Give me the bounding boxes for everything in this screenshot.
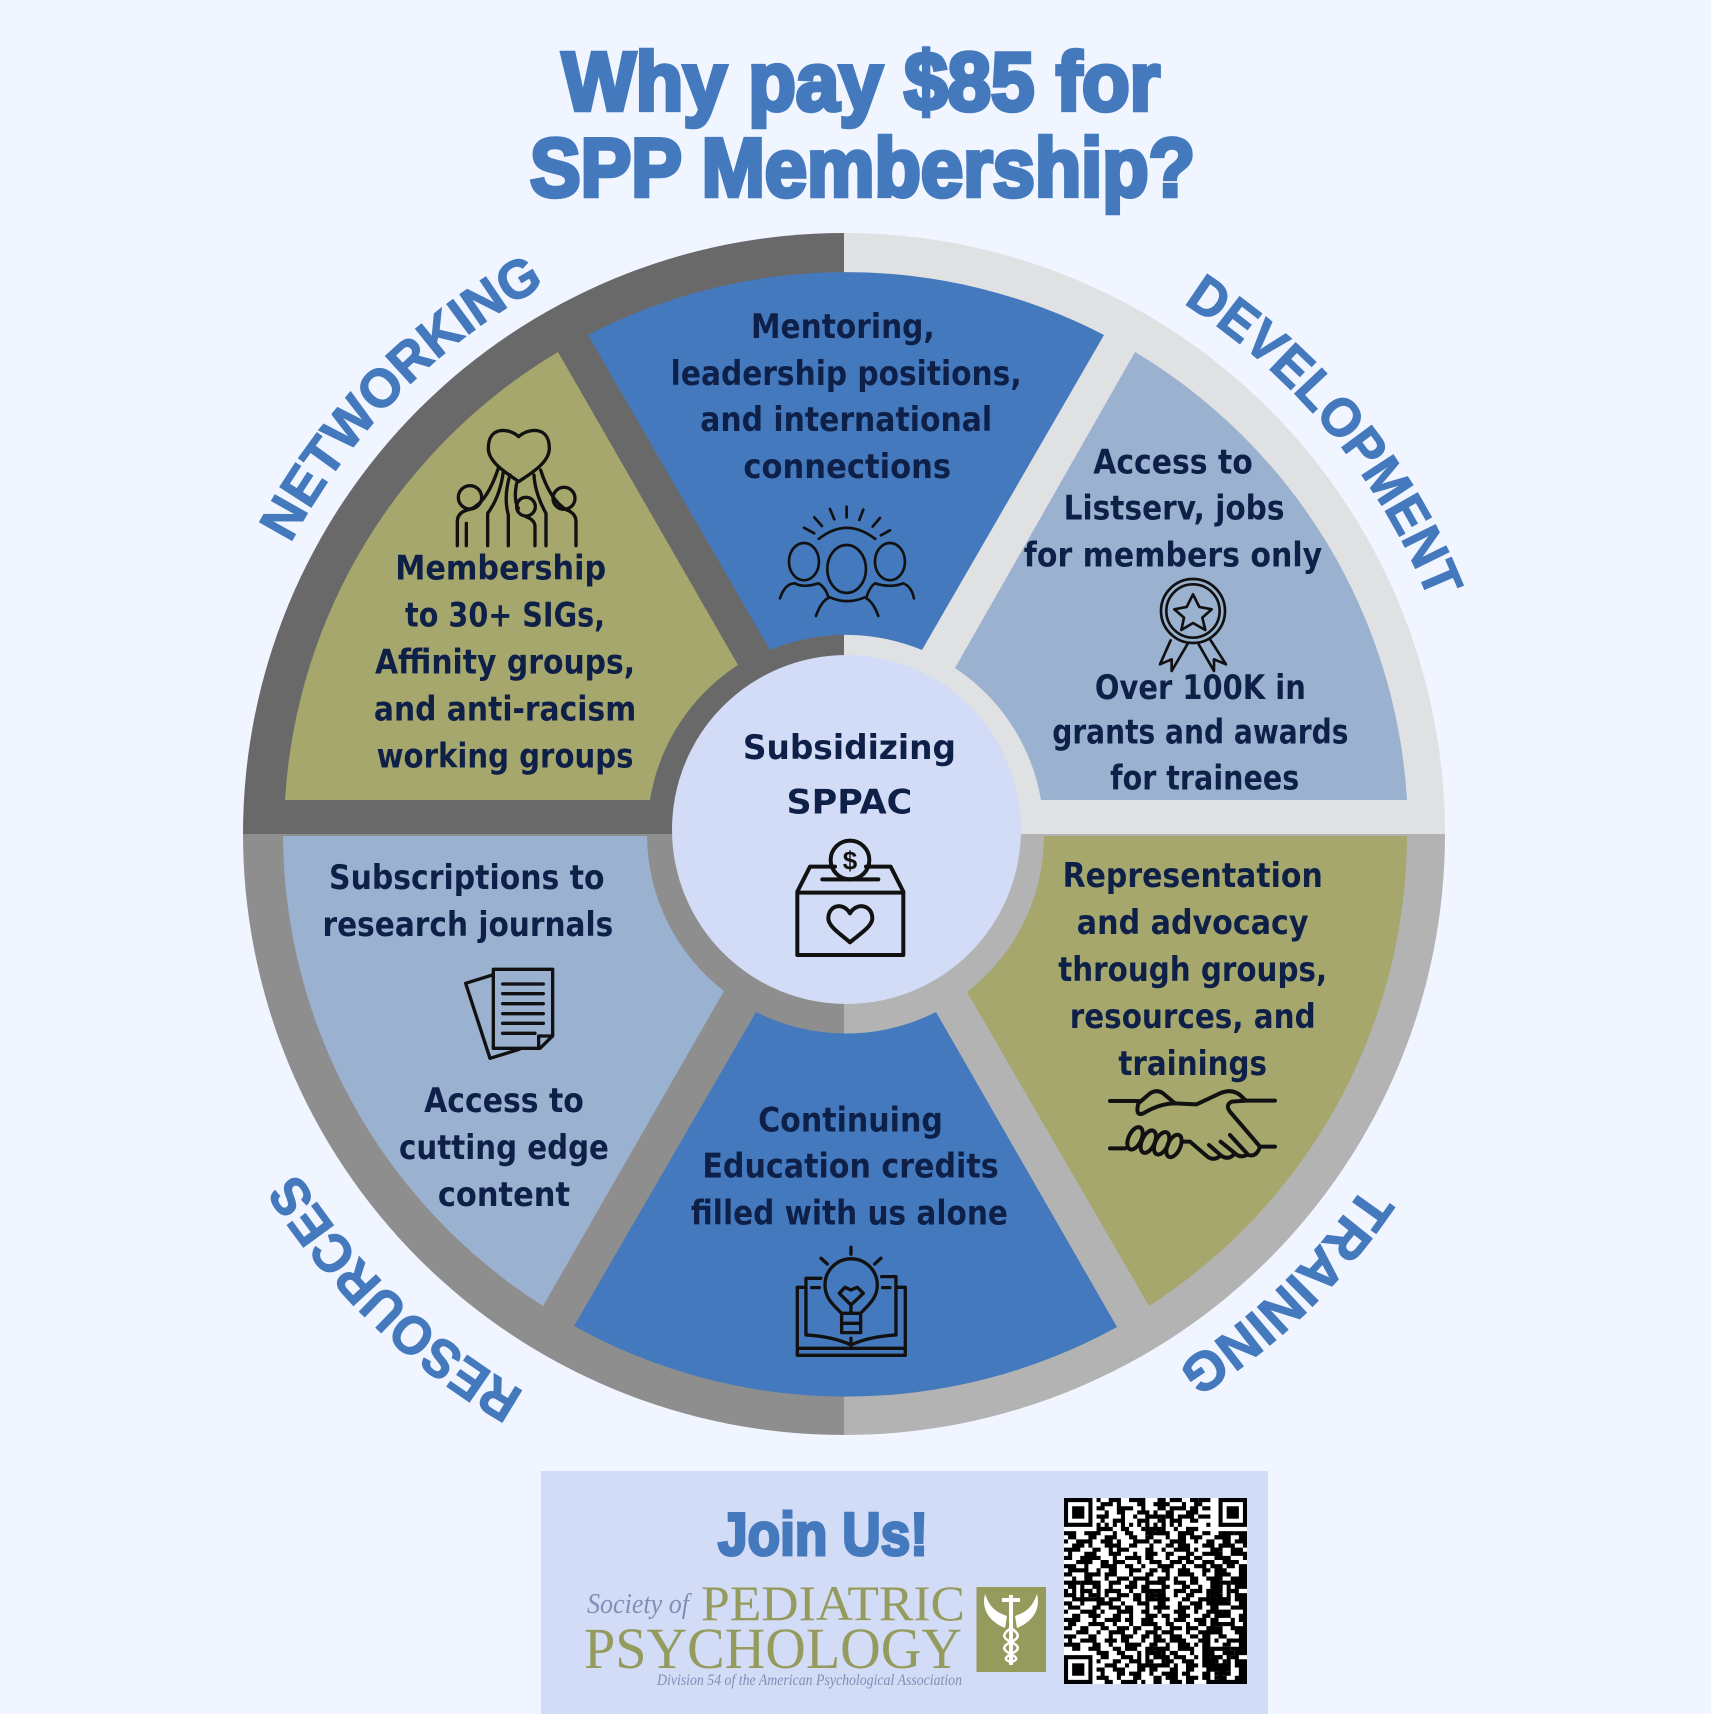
icon: handshake (1110, 1091, 1275, 1160)
text: membership: Membership (395, 549, 606, 588)
logo: society of pediatric psychology (584, 1575, 965, 1689)
text: membership (374, 549, 636, 776)
outer ring quadrants (243, 233, 1445, 1435)
QR code (1064, 1498, 1247, 1684)
text: subsidizing: Subsidizing (743, 728, 956, 767)
title: Why pay $85 for (562, 35, 1160, 128)
text: membership: Affinity groups, (375, 643, 635, 682)
icon: donation box (797, 841, 903, 955)
panel: subscriptions wedge (283, 836, 724, 1306)
text: mentoring: connections (743, 447, 951, 486)
wedge text blocks (322, 307, 1348, 1233)
text: representation (1058, 856, 1327, 1083)
logo: society of pediatric psychology: PSYCHOLOGY (584, 1616, 962, 1681)
text: listserv: for members only (1024, 536, 1322, 575)
icon: group of people (780, 507, 914, 616)
text: representation: through groups, (1058, 950, 1327, 989)
text: mentoring: and international (700, 400, 992, 439)
text: subsidizing: SPPAC (787, 783, 912, 822)
text: continuing education: filled with us alone (691, 1194, 1008, 1233)
text: representation: trainings (1118, 1044, 1267, 1083)
text: membership: to 30+ SIGs, (405, 596, 605, 635)
text: subscriptions: research journals (322, 905, 613, 944)
text: membership: working groups (377, 737, 634, 776)
text: cutting edge: content (438, 1175, 570, 1214)
logo: emblem (976, 1587, 1046, 1672)
label: networking: NETWORKING (258, 258, 540, 542)
text: subsidizing (743, 728, 956, 822)
finder and alignment squares (1064, 1498, 1247, 1684)
icon: donation box: $ (843, 845, 858, 875)
panel: membership wedge (285, 352, 738, 800)
panel: listserv wedge (955, 352, 1407, 800)
icon: documents (466, 969, 553, 1058)
label: development: DEVELOPMENT (1186, 273, 1464, 590)
icon: people lifting heart (457, 430, 576, 546)
wheel (243, 233, 1445, 1435)
text: listserv (1024, 443, 1322, 575)
icon: medal (1160, 579, 1226, 671)
text: representation: resources, and (1070, 997, 1316, 1036)
text: subscriptions (322, 858, 613, 944)
heading: join us: Join Us! (718, 1501, 928, 1568)
text: continuing education: Education credits (702, 1147, 999, 1186)
logo: society of pediatric psychology: Society of (587, 1589, 692, 1620)
label: resources: RESOURCES (270, 1178, 522, 1423)
text: grants: grants and awards (1052, 713, 1348, 752)
title: SPP Membership? (530, 121, 1195, 214)
panel: continuing education wedge (574, 1012, 1117, 1397)
text: listserv: Access to (1093, 443, 1253, 482)
logo: society of pediatric psychology: PEDIATRIC (701, 1575, 965, 1631)
text: representation: Representation (1063, 856, 1323, 895)
logo: society of pediatric psychology: Division 54 of the American Psychological Association (656, 1672, 962, 1689)
text: grants: for trainees (1110, 759, 1299, 798)
text: continuing education: Continuing (758, 1101, 943, 1140)
text: representation: and advocacy (1077, 903, 1309, 942)
panel: representation wedge (967, 836, 1407, 1306)
text: mentoring: Mentoring, (751, 307, 935, 346)
panel: mentoring wedge (588, 272, 1104, 650)
text: subscriptions: Subscriptions to (329, 858, 605, 897)
text: mentoring: leadership positions, (671, 354, 1022, 393)
label: training: TRAINING (1182, 1194, 1396, 1392)
panel: center circle (672, 655, 1021, 1004)
icon: light bulb and book (797, 1247, 905, 1355)
text: cutting edge: Access to (424, 1081, 584, 1120)
text: grants (1052, 668, 1348, 798)
text: membership: and anti-racism (374, 690, 636, 729)
text: continuing education (691, 1101, 1008, 1233)
text: cutting edge: cutting edge (399, 1128, 609, 1167)
title (530, 35, 1195, 214)
text: grants: Over 100K in (1095, 668, 1306, 707)
panel: join us footer (541, 1471, 1268, 1714)
text: cutting edge (399, 1081, 609, 1214)
text: mentoring (671, 307, 1022, 486)
text: listserv: Listserv, jobs (1064, 489, 1285, 528)
